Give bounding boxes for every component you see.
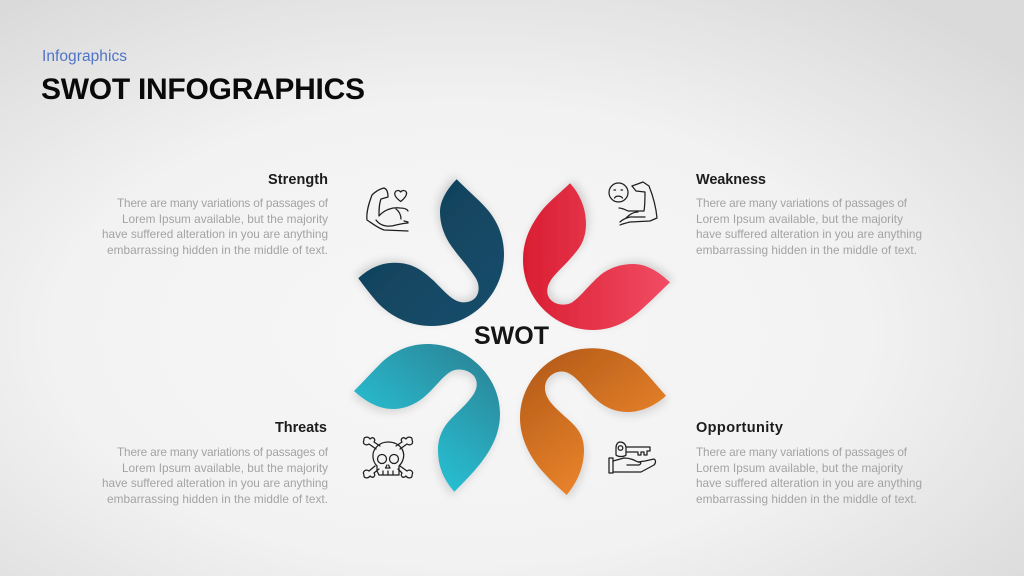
petal: weakness: [523, 183, 670, 330]
heading: threats: Threats: [275, 420, 327, 436]
text block: opportunity: There are many variations of passages of: [696, 445, 908, 459]
heading: weakness: Weakness: [696, 172, 766, 188]
icon: weak arm with sad face: [609, 182, 657, 225]
center label: SWOT: [474, 322, 549, 350]
text block: threats: embarrassing hidden in the middle of text.: [107, 492, 328, 506]
heading: strength: Strength: [268, 172, 328, 188]
panel: threats text: [102, 420, 329, 506]
petal: opportunity: [520, 348, 666, 495]
panel: weakness text: [696, 172, 922, 257]
text block: weakness: Lorem Ipsum available, but the majority: [696, 212, 903, 226]
title: SWOT INFOGRAPHICS: [41, 73, 365, 106]
text block: weakness: [696, 196, 922, 257]
text block: threats: There are many variations of passages of: [117, 445, 329, 459]
text block: weakness: have suffered alteration in you are anything: [696, 227, 922, 241]
icon: skull and crossbones: [363, 437, 413, 478]
petal: strength: [358, 179, 504, 326]
text block: threats: [102, 445, 329, 506]
text block: strength: [102, 196, 329, 257]
text block: threats: have suffered alteration in you are anything: [102, 476, 328, 490]
heading: opportunity: Opportunity: [696, 420, 783, 436]
text block: strength: have suffered alteration in you are anything: [102, 227, 328, 241]
text block: threats: Lorem Ipsum available, but the majority: [122, 461, 328, 475]
icon: flexed arm with heart: [367, 188, 408, 231]
panel: opportunity text: [696, 420, 922, 506]
text block: opportunity: have suffered alteration in you are anything: [696, 476, 922, 490]
petal: threats: [354, 344, 500, 492]
text block: opportunity: [696, 445, 922, 506]
panel: strength text: [102, 172, 329, 257]
subtitle: Infographics: [42, 48, 127, 65]
text block: strength: There are many variations of passages of: [117, 196, 329, 210]
text block: opportunity: Lorem Ipsum available, but the majority: [696, 461, 903, 475]
text block: strength: embarrassing hidden in the middle of text.: [107, 243, 328, 257]
text block: weakness: embarrassing hidden in the middle of text.: [696, 243, 917, 257]
text block: weakness: There are many variations of passages of: [696, 196, 908, 210]
icon: key over hand: [609, 442, 656, 473]
text block: strength: Lorem Ipsum available, but the majority: [122, 212, 328, 226]
text block: opportunity: embarrassing hidden in the middle of text.: [696, 492, 917, 506]
